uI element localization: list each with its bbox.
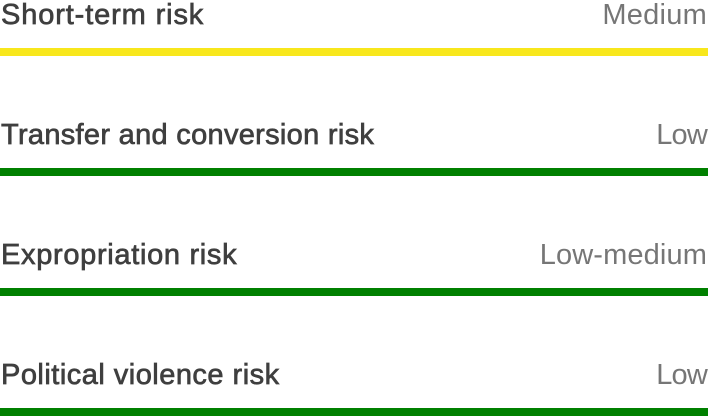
bar: green (0, 168, 708, 176)
bar: green (0, 288, 708, 296)
panel: transfer and conversion risk row (0, 119, 708, 176)
rating: low-medium: Low-medium (540, 239, 707, 271)
rating: low: Low (656, 359, 707, 391)
rating: low: Low (656, 119, 707, 151)
panel: political violence risk row (0, 359, 708, 416)
label: expropriation risk: Expropriation risk (1, 239, 237, 271)
bar: yellow (0, 48, 708, 56)
label: political violence risk: Political violence risk (1, 359, 280, 391)
bar: green (0, 408, 708, 416)
label: transfer and conversion risk: Transfer and conversion risk (1, 119, 374, 151)
panel: short-term risk row (0, 0, 708, 56)
panel: expropriation risk row (0, 239, 708, 296)
